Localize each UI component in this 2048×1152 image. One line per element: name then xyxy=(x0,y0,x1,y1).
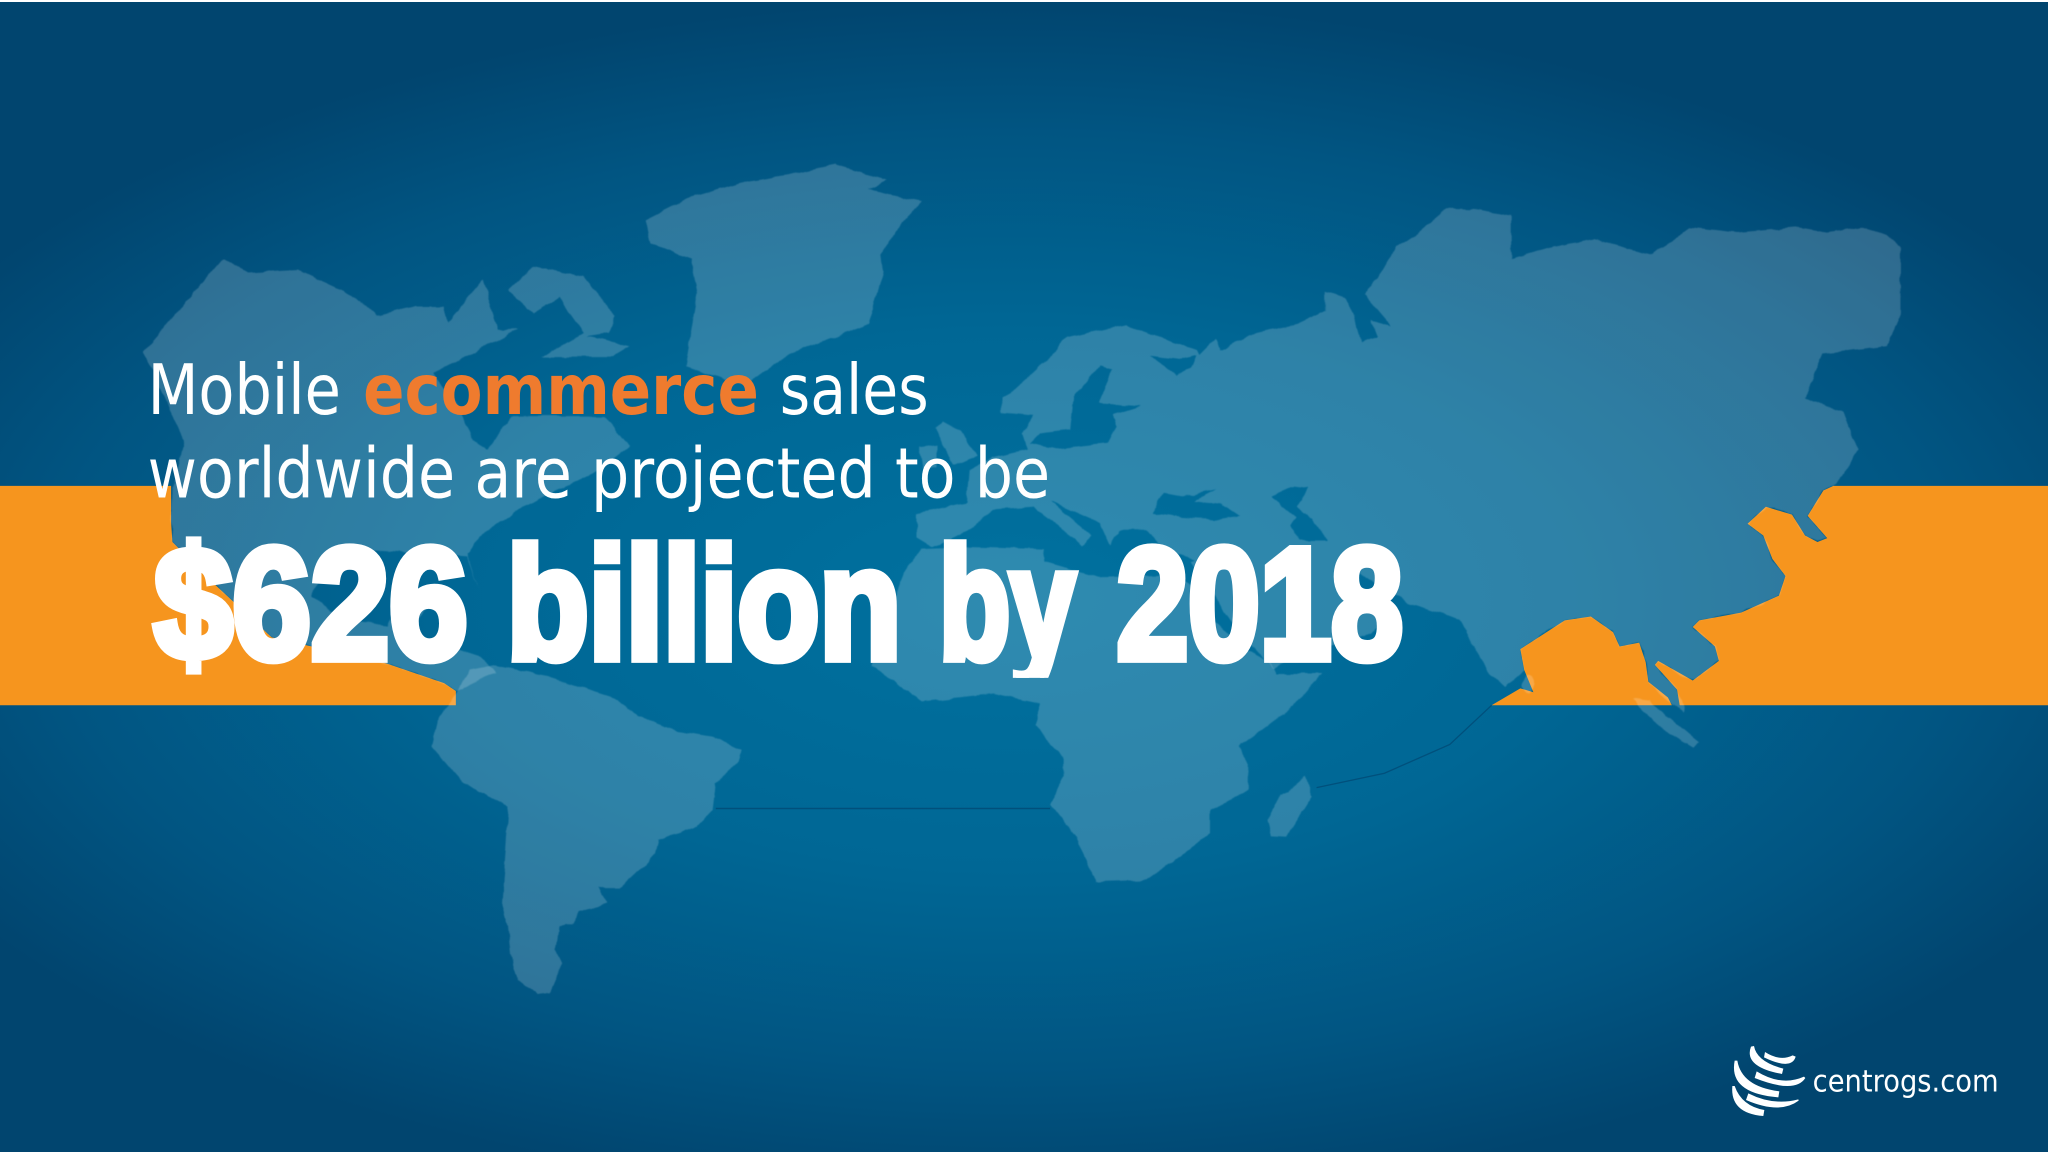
orange band: left segment xyxy=(0,486,456,705)
continent: Sumatra xyxy=(1633,698,1699,747)
logo: centrogs.com xyxy=(1732,1046,1999,1116)
line one: sales: sales xyxy=(780,351,929,431)
orange band: right segment xyxy=(1492,486,2048,705)
continent: Sri Lanka xyxy=(1523,675,1533,694)
map continents xyxy=(144,165,1900,995)
line one: Mobile: Mobile xyxy=(148,351,341,431)
logo text: centrogs.com xyxy=(1813,1065,1999,1100)
continent: Africa xyxy=(872,547,1322,882)
continent: South America xyxy=(432,665,741,995)
continent: Ireland xyxy=(920,444,936,469)
line two: worldwide are projected to be xyxy=(148,435,1050,515)
figure: by: by xyxy=(939,516,1075,692)
big figure xyxy=(151,536,1402,678)
figure: amount: $626 xyxy=(154,516,468,692)
ocean line: Indian Ocean xyxy=(1317,705,1492,788)
continent: Greenland xyxy=(645,165,921,385)
continent: Great Britain xyxy=(936,422,977,465)
world map with orange band xyxy=(0,165,2048,995)
continent: Arctic islands xyxy=(508,266,630,357)
figure: year: 2018 xyxy=(1117,516,1403,692)
continent: Madagascar xyxy=(1267,777,1312,837)
line one: ecommerce highlight: ecommerce xyxy=(363,351,759,431)
figure: billion: billion xyxy=(507,516,901,692)
continent: North America xyxy=(144,259,630,691)
continent: Eurasia with inland seas xyxy=(917,208,1900,712)
ocean line: south Atlantic xyxy=(716,807,1050,809)
icon: striped globe xyxy=(1732,1046,1805,1116)
headline text xyxy=(148,351,1403,692)
